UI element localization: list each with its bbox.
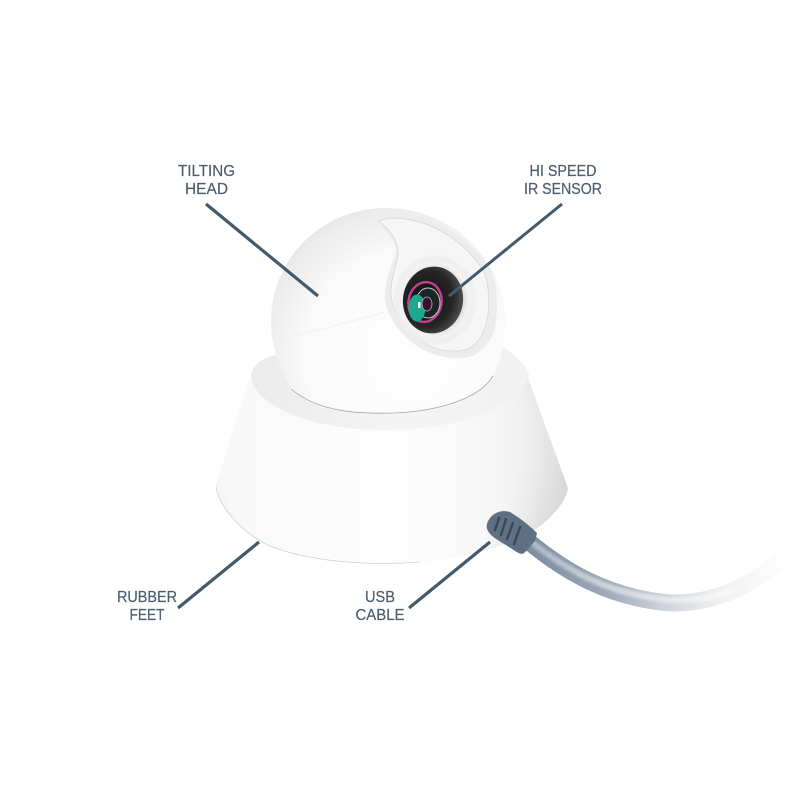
label: hi speed IR sensor: IR SENSOR [524, 181, 602, 198]
camera base [216, 345, 568, 563]
USB cable [487, 511, 800, 603]
cable connector boot [487, 511, 537, 554]
pointer line: USB cable [409, 542, 490, 608]
pointer line: rubber feet [178, 542, 259, 608]
tilting head sphere [271, 208, 505, 413]
label: tilting head: HEAD [185, 181, 228, 198]
lens housing [377, 212, 497, 358]
label: USB cable: USB [365, 589, 395, 606]
label: rubber feet: RUBBER [117, 589, 177, 606]
label: USB cable: CABLE [356, 607, 404, 624]
label: rubber feet: FEET [130, 607, 165, 624]
base top rim [251, 345, 529, 430]
lens surround ring [394, 256, 476, 344]
label: hi speed IR sensor: HI SPEED [530, 163, 596, 180]
lens body [398, 262, 468, 338]
label: tilting head: TILTING [178, 163, 235, 180]
pointer line: hi speed IR sensor [449, 204, 562, 296]
pointer line: tilting head [206, 204, 318, 296]
lens glass [405, 279, 445, 325]
